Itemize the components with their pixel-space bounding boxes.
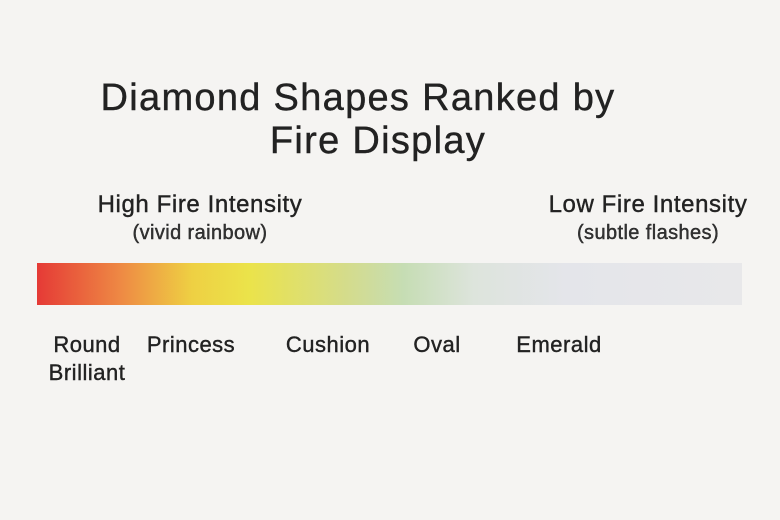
label: low fire intensity bbox=[549, 191, 748, 244]
label: high fire intensity: (vivid rainbow) bbox=[133, 222, 267, 244]
label: round brilliant bbox=[49, 332, 125, 385]
shape labels bbox=[49, 332, 602, 385]
title bbox=[101, 77, 615, 162]
label: oval: Oval bbox=[413, 332, 461, 357]
label: cushion: Cushion bbox=[286, 332, 370, 357]
label: round brilliant: Brilliant bbox=[49, 360, 125, 385]
gradient bar bbox=[37, 263, 742, 305]
title: Fire Display bbox=[270, 120, 486, 162]
label: low fire intensity: (subtle flashes) bbox=[577, 222, 719, 244]
label: high fire intensity: High Fire Intensity bbox=[98, 191, 302, 218]
label: high fire intensity bbox=[98, 191, 302, 244]
title: Diamond Shapes Ranked by bbox=[101, 77, 615, 119]
label: round brilliant: Round bbox=[53, 332, 121, 357]
label: emerald: Emerald bbox=[516, 332, 602, 357]
label: princess: Princess bbox=[147, 332, 235, 357]
label: low fire intensity: Low Fire Intensity bbox=[549, 191, 747, 218]
